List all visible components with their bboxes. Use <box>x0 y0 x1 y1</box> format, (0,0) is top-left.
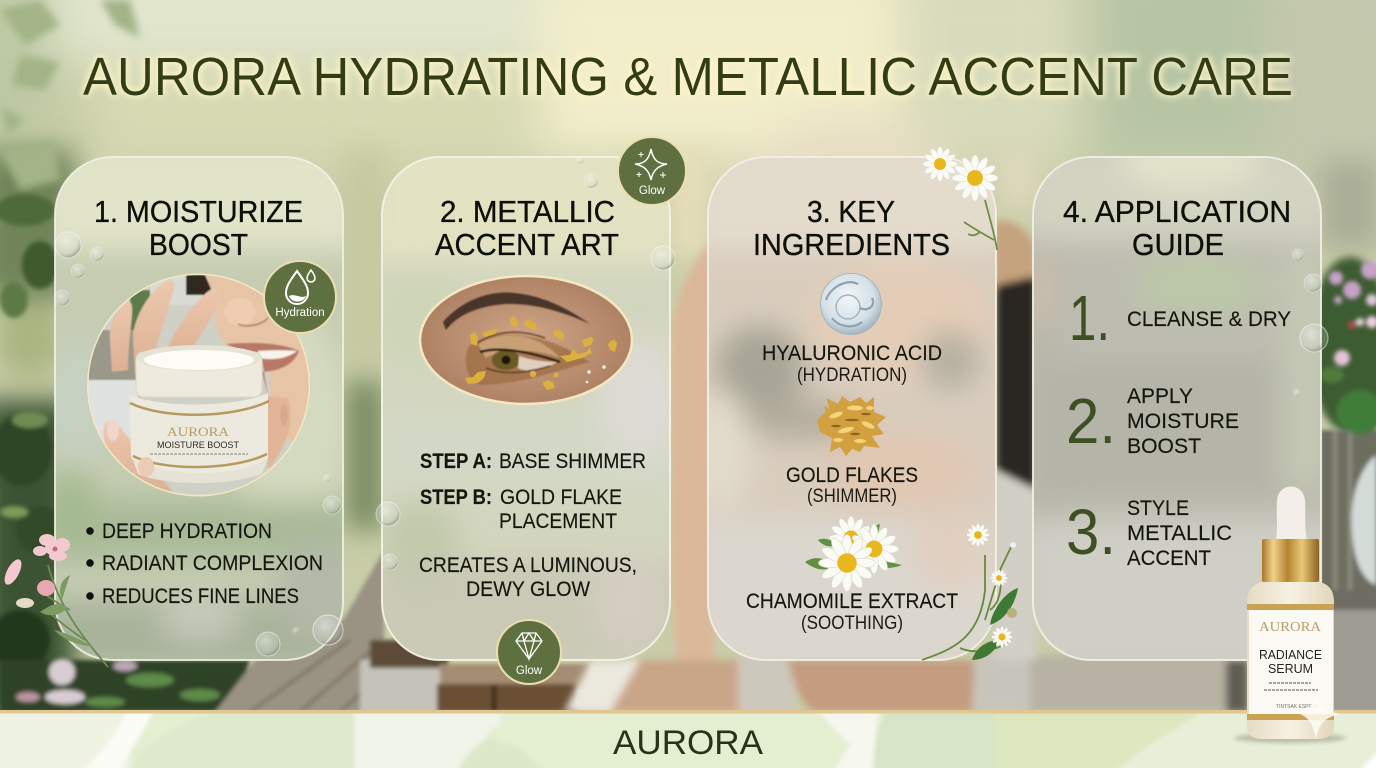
fingers <box>110 302 132 372</box>
ingredient text: gold flakes: (SHIMMER) <box>807 486 897 507</box>
result note: CREATES A LUMINOUS, <box>419 554 637 577</box>
heading: 4. APPLICATION <box>1063 194 1291 229</box>
panel: 1. moisturize boost <box>54 156 344 661</box>
ingredient text: hyaluronic acid: (HYDRATION) <box>797 365 907 386</box>
heading <box>1063 194 1291 262</box>
product: radiance serum bottle: AURORA <box>1259 620 1322 635</box>
result note <box>419 554 637 601</box>
step 3: ACCENT <box>1127 547 1211 570</box>
photo: cream jar at face <box>88 275 320 495</box>
ingredient text: chamomile extract <box>746 590 958 634</box>
badge: hydration: Hydration <box>275 307 325 319</box>
footer band: AURORA <box>613 724 763 762</box>
footer band <box>0 705 1376 768</box>
step 3: STYLE <box>1127 497 1189 520</box>
steps: STEP A: <box>420 450 492 473</box>
ingredient text: gold flakes: GOLD FLAKES <box>786 464 918 487</box>
heading: GUIDE <box>1132 227 1224 262</box>
soft top-left leaves <box>0 0 140 190</box>
decoration: pink flower sprig <box>1 534 108 667</box>
product: radiance serum bottle: SERUM <box>1268 661 1313 676</box>
ingredient text: hyaluronic acid: HYALURONIC ACID <box>762 342 942 365</box>
ingredient text: hyaluronic acid <box>762 342 942 386</box>
step 3 <box>1066 496 1232 570</box>
right-side scene <box>1320 261 1376 712</box>
benefits list <box>86 520 323 608</box>
step 3: 3. <box>1066 496 1116 568</box>
steps: GOLD FLAKE <box>500 486 622 509</box>
step 1: 1. <box>1069 282 1110 354</box>
panel: 2. metallic accent art <box>370 137 690 684</box>
product: radiance serum bottle: TINTSAK ESPROF <box>1276 704 1319 710</box>
title: AURORA HYDRATING & METALLIC ACCENT CARE <box>83 47 1293 107</box>
decoration: chamomile sprig bottom right of panel 3 <box>922 524 1018 660</box>
benefits list: DEEP HYDRATION <box>102 520 272 543</box>
woman: arms, hair, shirt <box>564 221 1376 712</box>
steps: BASE SHIMMER <box>499 450 646 473</box>
product: radiance serum bottle: RADIANCE <box>1259 647 1322 662</box>
heading: 2. METALLIC <box>440 194 615 229</box>
decoration: daisies top right of panel 3 <box>923 147 998 250</box>
result note: DEWY GLOW <box>466 578 590 601</box>
steps <box>420 450 646 533</box>
face <box>205 275 320 440</box>
step 2: MOISTURE <box>1127 410 1239 433</box>
badge: glow sparkle: Glow <box>639 185 666 197</box>
icon: chamomile flowers <box>805 516 902 592</box>
cream jar: AURORA <box>167 424 230 439</box>
step 1: CLEANSE & DRY <box>1127 308 1291 331</box>
heading: 3. KEY <box>807 194 895 229</box>
heading: INGREDIENTS <box>753 227 950 262</box>
badge: glow diamond <box>497 620 561 684</box>
step 2 <box>1066 385 1239 458</box>
bench <box>360 660 440 712</box>
steps: PLACEMENT <box>499 510 617 533</box>
steps: STEP B: <box>420 486 492 509</box>
badge: hydration <box>264 261 336 333</box>
heading <box>753 194 950 262</box>
step 2: BOOST <box>1127 435 1201 458</box>
icon: hyaluronic acid droplet <box>820 274 882 334</box>
product: radiance serum bottle <box>1234 486 1346 743</box>
heading: BOOST <box>149 227 248 262</box>
ingredient text: gold flakes <box>786 464 918 507</box>
heading: 1. MOISTURIZE <box>94 194 303 229</box>
cream jar <box>130 345 269 483</box>
step 3: METALLIC <box>1127 522 1232 545</box>
left foliage <box>0 150 1376 720</box>
benefits list: RADIANT COMPLEXION <box>102 552 323 575</box>
heading: ACCENT ART <box>435 227 619 262</box>
heading <box>435 194 619 262</box>
photo: gold eye makeup <box>420 276 632 404</box>
badge: glow sparkle <box>618 137 686 205</box>
ingredient text: chamomile extract: CHAMOMILE EXTRACT <box>746 590 958 613</box>
heading <box>94 194 303 262</box>
step 2: APPLY <box>1127 385 1193 408</box>
cream jar: MOISTURE BOOST <box>157 440 239 450</box>
ingredient text: chamomile extract: (SOOTHING) <box>801 613 903 634</box>
step 1 <box>1069 282 1291 354</box>
panel: 4. application guide <box>1032 156 1322 661</box>
icon: gold flakes <box>817 396 886 456</box>
decoration: water droplets <box>54 156 1328 656</box>
badge: glow diamond: Glow <box>516 665 543 677</box>
benefits list: REDUCES FINE LINES <box>102 585 299 608</box>
wood deck <box>215 550 384 712</box>
step 2: 2. <box>1066 385 1116 457</box>
panel: 3. key ingredients <box>707 156 997 661</box>
